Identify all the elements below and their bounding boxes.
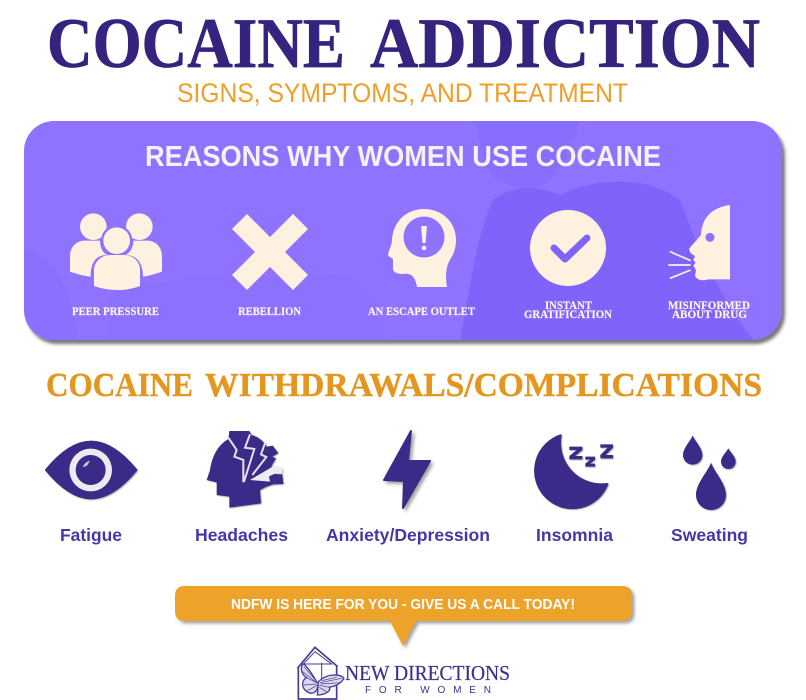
panel background (24, 121, 782, 340)
panel: reasons why women use cocaine (24, 121, 782, 340)
faint background photo (24, 182, 753, 340)
label: sweating: Sweating (671, 525, 748, 545)
callout banner (175, 586, 632, 646)
icon: check mark circle (530, 210, 606, 286)
label: instant gratification: GRATIFICATION (524, 309, 613, 321)
icon: head with exclamation (388, 209, 456, 287)
label: instant gratification (524, 300, 613, 321)
icon: speaking face (668, 205, 730, 280)
icon: lightning bolt (384, 431, 430, 508)
head silhouette (207, 431, 283, 508)
logo tagline: FOR WOMEN (365, 685, 491, 696)
icon: moon with zzz (535, 435, 613, 508)
callout shape (175, 586, 632, 646)
label: fatigue: Fatigue (60, 525, 122, 545)
icon: eye (46, 442, 136, 498)
title (47, 5, 760, 83)
logo: new directions for women (297, 647, 510, 699)
icon: rebellion X (232, 214, 308, 290)
title: ADDICTION (370, 5, 760, 83)
label: peer pressure: PEER PRESSURE (72, 306, 159, 318)
section heading: WITHDRAWALS/COMPLICATIONS (205, 367, 762, 404)
cracks (228, 434, 266, 482)
section heading: COCAINE (46, 367, 193, 404)
label: misinformed about drug (668, 300, 750, 321)
label: headaches: Headaches (195, 525, 288, 545)
subtitle: SIGNS, SYMPTOMS, AND TREATMENT (177, 78, 628, 108)
panel heading: REASONS WHY WOMEN USE COCAINE (145, 141, 661, 173)
logo wordmark: NEW DIRECTIONS (345, 661, 510, 685)
icon: sweat drops (683, 436, 736, 510)
icon: headache (207, 431, 283, 508)
title: COCAINE (47, 5, 345, 83)
wedge gap (250, 466, 282, 482)
label: insomnia: Insomnia (536, 525, 613, 545)
label: anxiety/depression: Anxiety/Depression (326, 525, 490, 545)
label: instant gratification: INSTANT (545, 300, 592, 312)
label: misinformed about drug: MISINFORMED (668, 300, 750, 312)
logo icon: house with butterfly (297, 647, 344, 699)
label: misinformed about drug: ABOUT DRUG (672, 309, 747, 321)
callout text: NDFW IS HERE FOR YOU - GIVE US A CALL TODAY! (231, 596, 575, 613)
label: rebellion: REBELLION (238, 306, 302, 318)
icon: peer pressure (70, 213, 162, 290)
label: an escape outlet: AN ESCAPE OUTLET (368, 306, 475, 318)
